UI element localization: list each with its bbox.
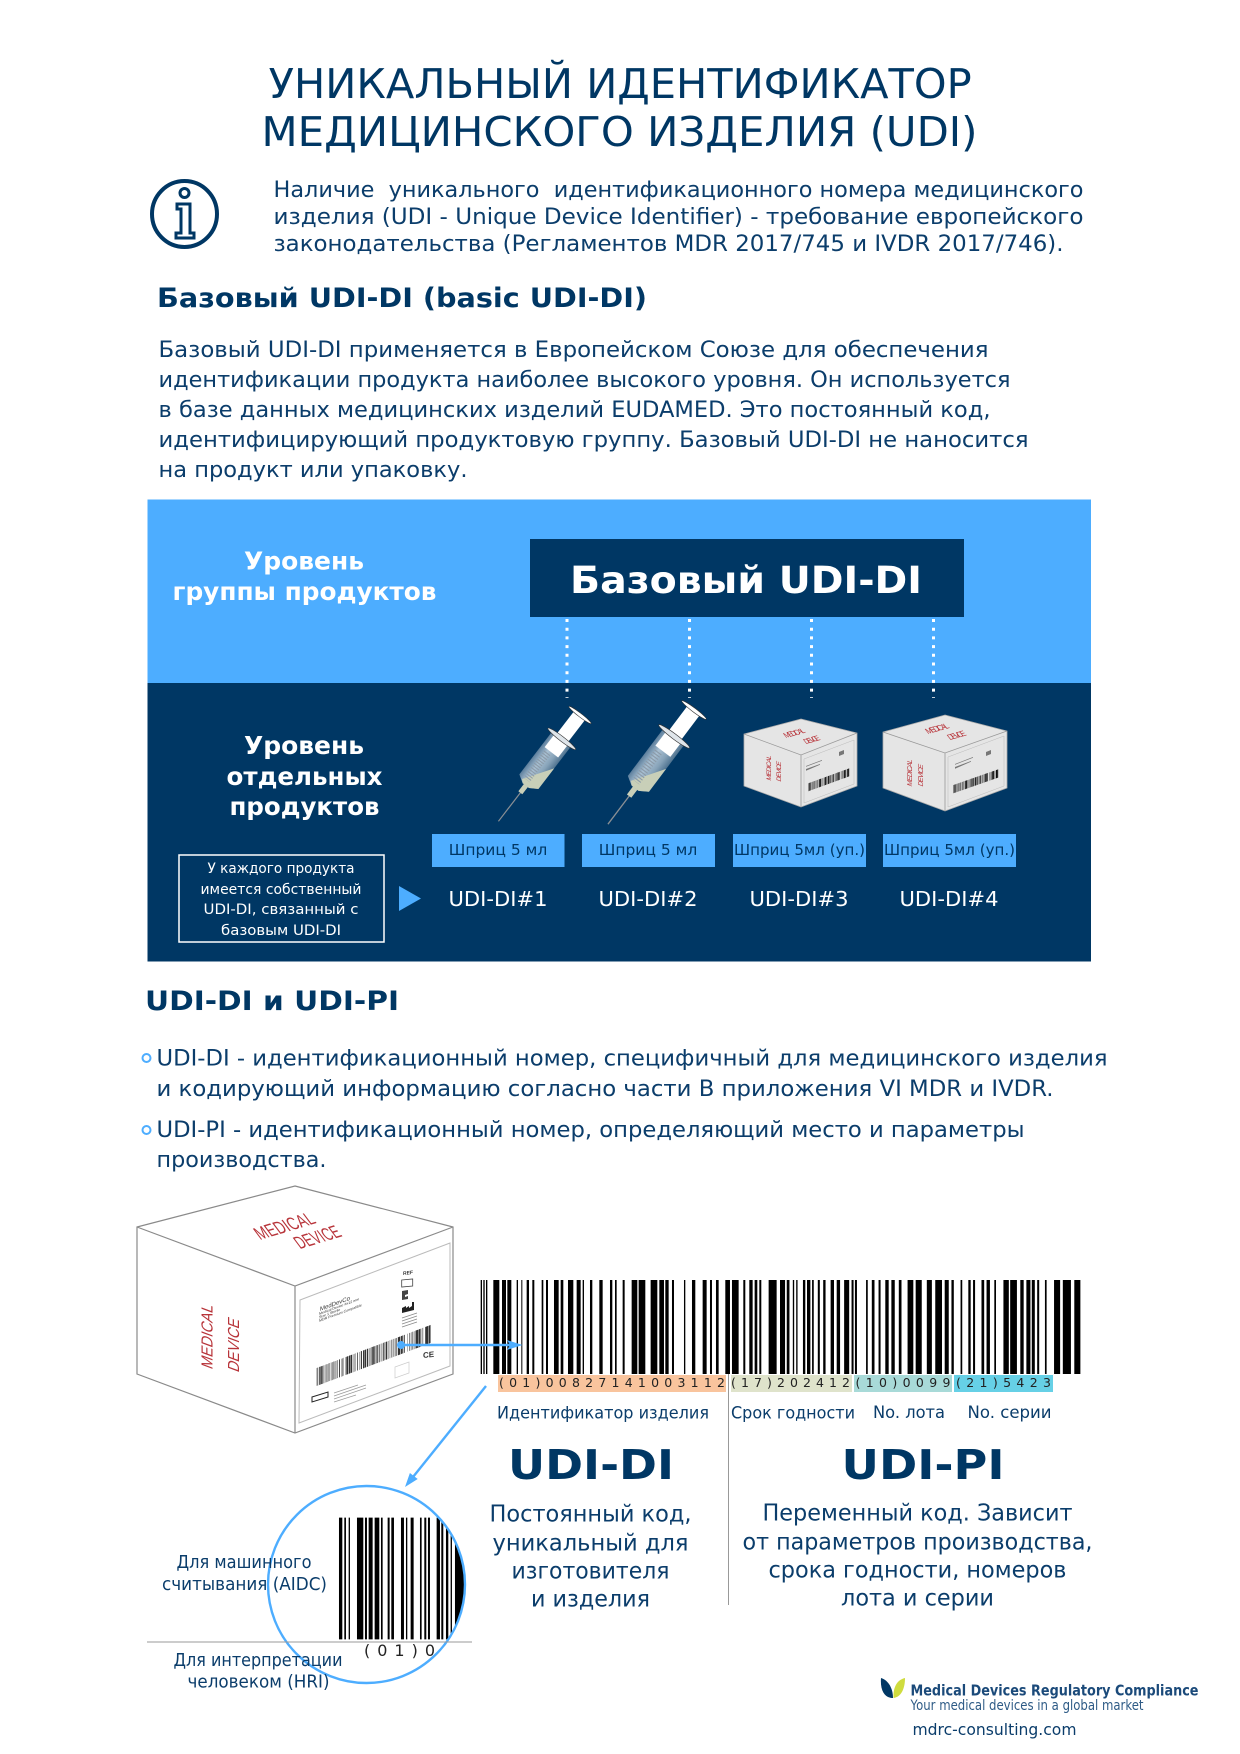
intro text <box>274 178 1084 257</box>
icon: small box 3: DEVICE <box>776 760 783 783</box>
note box <box>179 855 384 942</box>
bullet: UDI-PI: UDI-PI - идентификационный номер, определяющий место и параметры <box>156 1117 1024 1143</box>
group level label <box>172 546 436 606</box>
box text: top face: MEDICAL <box>249 1208 320 1243</box>
product label 4 <box>883 834 1016 867</box>
barcode human-readable strip: (21)5423 <box>956 1375 1051 1390</box>
heading: UDI-PI: UDI-PI <box>842 1441 1004 1489</box>
text block: basic UDI-DI description: идентификации продукта наиболее высокого уровня. Он используется <box>158 367 1010 393</box>
panel: product level background <box>148 683 1091 962</box>
box text: left face: DEVICE <box>224 1315 243 1374</box>
barcode segment labels <box>497 1403 1052 1424</box>
basic UDI-DI box <box>530 539 964 617</box>
basic UDI-DI box: Базовый UDI-DI <box>570 559 922 602</box>
product level label: Уровень <box>244 731 364 760</box>
text block: basic UDI-DI description: на продукт или упаковку. <box>158 457 468 483</box>
logo: Medical Devices Regulatory Compliance: Medical Devices Regulatory Compliance <box>910 1682 1198 1700</box>
text: UDI-PI description: срока годности, номеров <box>768 1558 1066 1584</box>
intro text: Наличие уникального идентификационного номера медицинского <box>274 178 1084 203</box>
magnifier circle <box>268 1486 465 1683</box>
product level label <box>226 731 382 821</box>
text: UDI-DI description <box>490 1502 692 1612</box>
label: human reading: человеком (HRI) <box>188 1672 330 1692</box>
product label 2: Шприц 5 мл <box>599 841 697 859</box>
text: UDI-DI description: уникальный для <box>492 1530 688 1556</box>
identifiers row: UDI-DI#3 <box>750 887 848 911</box>
identifiers row: UDI-DI#4 <box>900 887 998 911</box>
icon: small box 4: MEDICAL <box>923 722 952 736</box>
title: МЕДИЦИНСКОГО ИЗДЕЛИЯ (UDI) <box>262 108 978 156</box>
barcode segment labels: No. лота <box>873 1403 945 1423</box>
intro text: изделия (UDI - Unique Device Identifier) - требование европейского <box>274 205 1084 230</box>
box label: barcode and symbols: REF <box>403 1270 413 1277</box>
bullet: UDI-DI: UDI-DI - идентификационный номер, специфичный для медицинского изделия <box>156 1046 1108 1072</box>
barcode <box>481 1280 1080 1374</box>
title: УНИКАЛЬНЫЙ ИДЕНТИФИКАТОР <box>269 60 972 108</box>
text: UDI-PI description <box>742 1500 1092 1612</box>
icon: syringe 1 <box>485 703 595 832</box>
barcode segment labels: Срок годности <box>731 1404 855 1424</box>
icon: small box 3: MEDICAL <box>781 726 807 740</box>
barcode human-readable strip: (10)0099 <box>856 1375 951 1390</box>
box label: barcode and symbols <box>312 1270 435 1402</box>
text: UDI-DI description: изготовителя <box>512 1558 670 1584</box>
bullet: UDI-PI <box>142 1117 1024 1173</box>
text: UDI-DI description: Постоянный код, <box>490 1502 692 1528</box>
label: machine reading <box>162 1553 327 1595</box>
box label: barcode and symbols: Size 1 Sterile <box>319 1308 340 1319</box>
note box: UDI-DI, связанный с <box>204 902 358 918</box>
barcode human-readable strip: (17)202412 <box>731 1375 850 1390</box>
label: human reading <box>174 1651 342 1692</box>
text block: basic UDI-DI description <box>158 337 1028 483</box>
icon: information <box>152 181 217 247</box>
logo: Medical Devices Regulatory Compliance: mdrc-consulting.com <box>912 1720 1076 1739</box>
arrow: barcode to magnifier <box>405 1386 486 1487</box>
heading: UDI-DI: UDI-DI <box>508 1441 674 1489</box>
text block: basic UDI-DI description: идентифицирующий продуктовую группу. Базовый UDI-DI не наносится <box>158 427 1028 453</box>
label: machine reading: считывания (AIDC) <box>162 1575 327 1595</box>
title <box>262 60 978 156</box>
product label 3: Шприц 5мл (уп.) <box>734 841 865 859</box>
icon: small box 4 <box>883 715 1007 811</box>
text: UDI-PI description: Переменный код. Зависит <box>762 1500 1072 1526</box>
product label 1: Шприц 5 мл <box>449 841 547 859</box>
illustration: device box <box>137 1186 453 1433</box>
heading: basic UDI-DI: Базовый UDI-DI (basic UDI-DI) <box>157 283 647 314</box>
identifiers row <box>448 887 998 911</box>
box text: left face <box>198 1301 243 1374</box>
box text: left face: MEDICAL <box>198 1301 217 1371</box>
bullet: UDI-PI: производства. <box>156 1147 326 1173</box>
product label 1 <box>432 834 564 867</box>
label: human reading: Для интерпретации <box>174 1651 342 1671</box>
logo: Medical Devices Regulatory Compliance <box>881 1678 1198 1739</box>
bullet: UDI-DI <box>142 1046 1108 1102</box>
icon: small box 4: DEVICE <box>945 729 969 742</box>
box label: barcode and symbols: Medical Device #x12 mm <box>319 1297 359 1316</box>
bullet: UDI-DI: и кодирующий информацию согласно части B приложения VI MDR и IVDR. <box>156 1076 1054 1102</box>
product level label: отдельных <box>226 762 382 791</box>
product label 2 <box>582 834 715 867</box>
panel: group level background <box>148 500 1091 683</box>
text block: basic UDI-DI description: в базе данных медицинских изделий EUDAMED. Это постоянный код, <box>158 397 990 423</box>
barcode segment labels: Идентификатор изделия <box>497 1404 709 1424</box>
note box: базовым UDI-DI <box>221 923 341 939</box>
heading: UDI-DI and UDI-PI: UDI-DI и UDI-PI <box>145 986 399 1017</box>
icon: small box 3: DEVICE <box>801 734 822 746</box>
barcode segment labels: No. серии <box>968 1403 1052 1423</box>
box label: barcode and symbols: MedDevCo <box>320 1295 350 1313</box>
panel: UDI-DI levels <box>148 500 1091 962</box>
product level label: продуктов <box>230 792 380 821</box>
magnified barcode <box>339 1518 467 1639</box>
logo: Medical Devices Regulatory Compliance: Your medical devices in a global market <box>910 1698 1144 1714</box>
group level label: Уровень <box>244 546 364 576</box>
barcode human-readable strip: (01)00827141003112 <box>499 1375 725 1390</box>
group level label: группы продуктов <box>172 577 436 606</box>
icon: small box 4: MEDICAL <box>905 757 914 788</box>
divider: DI and PI <box>728 1374 730 1605</box>
note box: имеется собственный <box>200 882 362 898</box>
label: machine reading: Для машинного <box>176 1553 312 1573</box>
icon: small box 4: DEVICE <box>916 762 925 788</box>
box label: barcode and symbols: MDR Premium Compatible <box>319 1303 362 1323</box>
identifiers row: UDI-DI#1 <box>448 887 548 911</box>
arrow: note to identifiers <box>399 886 421 911</box>
magnifier baseline <box>147 1641 472 1643</box>
box text: top face: DEVICE <box>289 1221 346 1252</box>
box text: top face <box>249 1208 346 1252</box>
text: UDI-PI description: от параметров производства, <box>742 1530 1092 1556</box>
text block: basic UDI-DI description: Базовый UDI-DI применяется в Европейском Союзе для обеспечения <box>158 337 988 363</box>
note box: У каждого продукта <box>208 861 354 877</box>
text: UDI-PI description: лота и серии <box>841 1586 994 1612</box>
icon: small box 3: MEDICAL <box>766 754 773 782</box>
product label 4: Шприц 5мл (уп.) <box>884 841 1015 859</box>
icon: syringe 2 <box>593 697 711 836</box>
barcode human-readable strip <box>498 1375 1053 1392</box>
bullet list <box>142 1046 1108 1173</box>
intro text: законодательства (Регламентов MDR 2017/745 и IVDR 2017/746). <box>274 232 1064 257</box>
icon: leaves <box>881 1678 905 1698</box>
icon: small box 3 <box>744 719 857 807</box>
text: UDI-DI description: и изделия <box>531 1586 650 1612</box>
dotted connectors <box>567 619 934 698</box>
product label 3 <box>733 834 866 867</box>
box label: barcode and symbols: CE <box>423 1350 435 1360</box>
arrow: box to barcode <box>397 1340 522 1350</box>
magnified readable digits: (01)0 <box>364 1641 435 1660</box>
identifiers row: UDI-DI#2 <box>598 887 698 911</box>
